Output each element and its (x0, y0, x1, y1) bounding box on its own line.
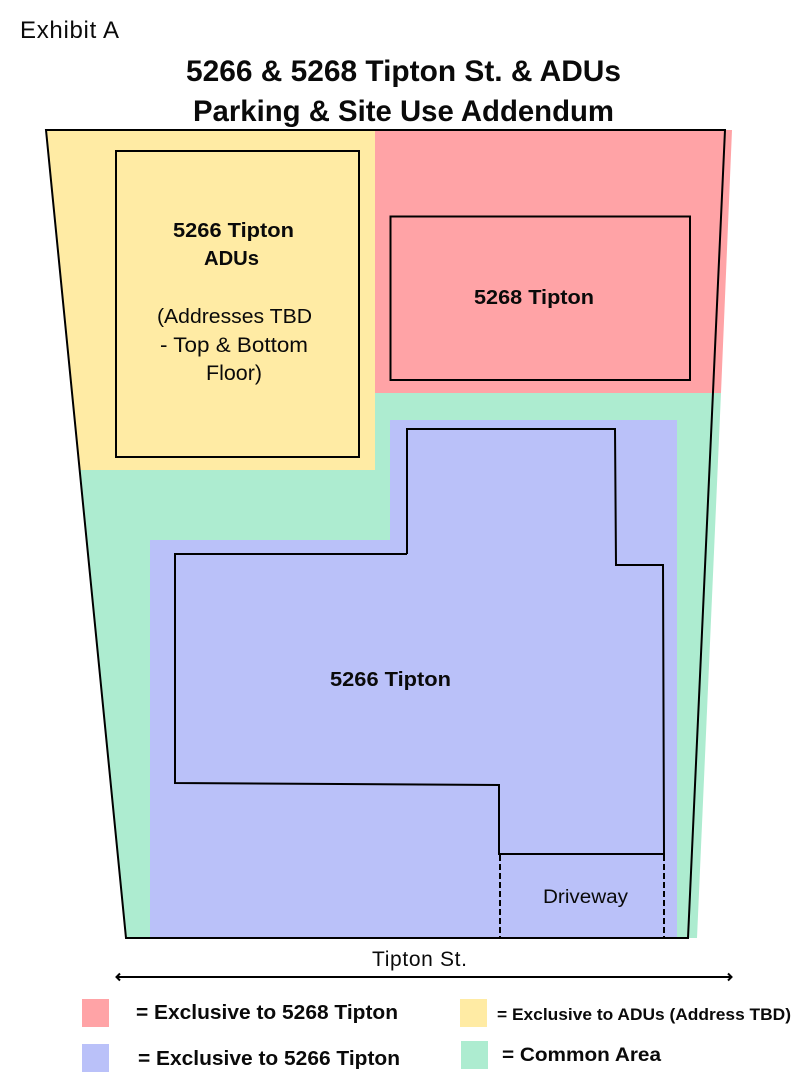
building: 5266 Tipton: 5266 Tipton (330, 669, 451, 691)
building: 5268 Tipton: 5268 Tipton (474, 287, 594, 309)
legend (82, 999, 791, 1072)
label: Exhibit A: Exhibit A (20, 17, 119, 44)
zone: exclusive to 5266 Tipton (150, 420, 677, 938)
building: 5266 Tipton ADUs: - Top & Bottom (160, 334, 308, 357)
legend item: 5268 Tipton (82, 999, 398, 1027)
title: Parking & Site Use Addendum (193, 95, 614, 128)
legend item: 5268 Tipton: = Exclusive to 5268 Tipton (136, 1002, 398, 1024)
building: 5266 Tipton ADUs (116, 151, 359, 457)
site plan (46, 130, 732, 938)
arrow: Tipton St. extent (116, 974, 732, 980)
zone: exclusive to 5268 Tipton (375, 130, 732, 393)
legend item: 5266 Tipton (82, 1044, 400, 1072)
title (186, 55, 621, 128)
building: 5266 Tipton ADUs: ADUs (204, 248, 259, 270)
zone: exclusive to ADUs (46, 130, 375, 470)
legend item: 5266 Tipton: = Exclusive to 5266 Tipton (138, 1048, 400, 1070)
street label: Tipton St. (372, 948, 467, 971)
legend item: common area: = Common Area (502, 1045, 661, 1066)
building: 5266 Tipton ADUs: (Addresses TBD (157, 306, 312, 328)
title: 5266 & 5268 Tipton St. & ADUs (186, 55, 621, 88)
driveway: Driveway (543, 887, 629, 908)
building: 5268 Tipton (390, 216, 690, 380)
legend item: ADUs (460, 999, 791, 1027)
legend item: common area (461, 1041, 661, 1069)
legend item: ADUs: = Exclusive to ADUs (Address TBD) (497, 1005, 791, 1024)
building: 5266 Tipton (175, 429, 664, 854)
zone: common area (80, 393, 721, 938)
building: 5266 Tipton ADUs: 5266 Tipton (173, 220, 294, 242)
building: 5266 Tipton ADUs: Floor) (206, 362, 262, 385)
lot boundary (46, 130, 725, 938)
